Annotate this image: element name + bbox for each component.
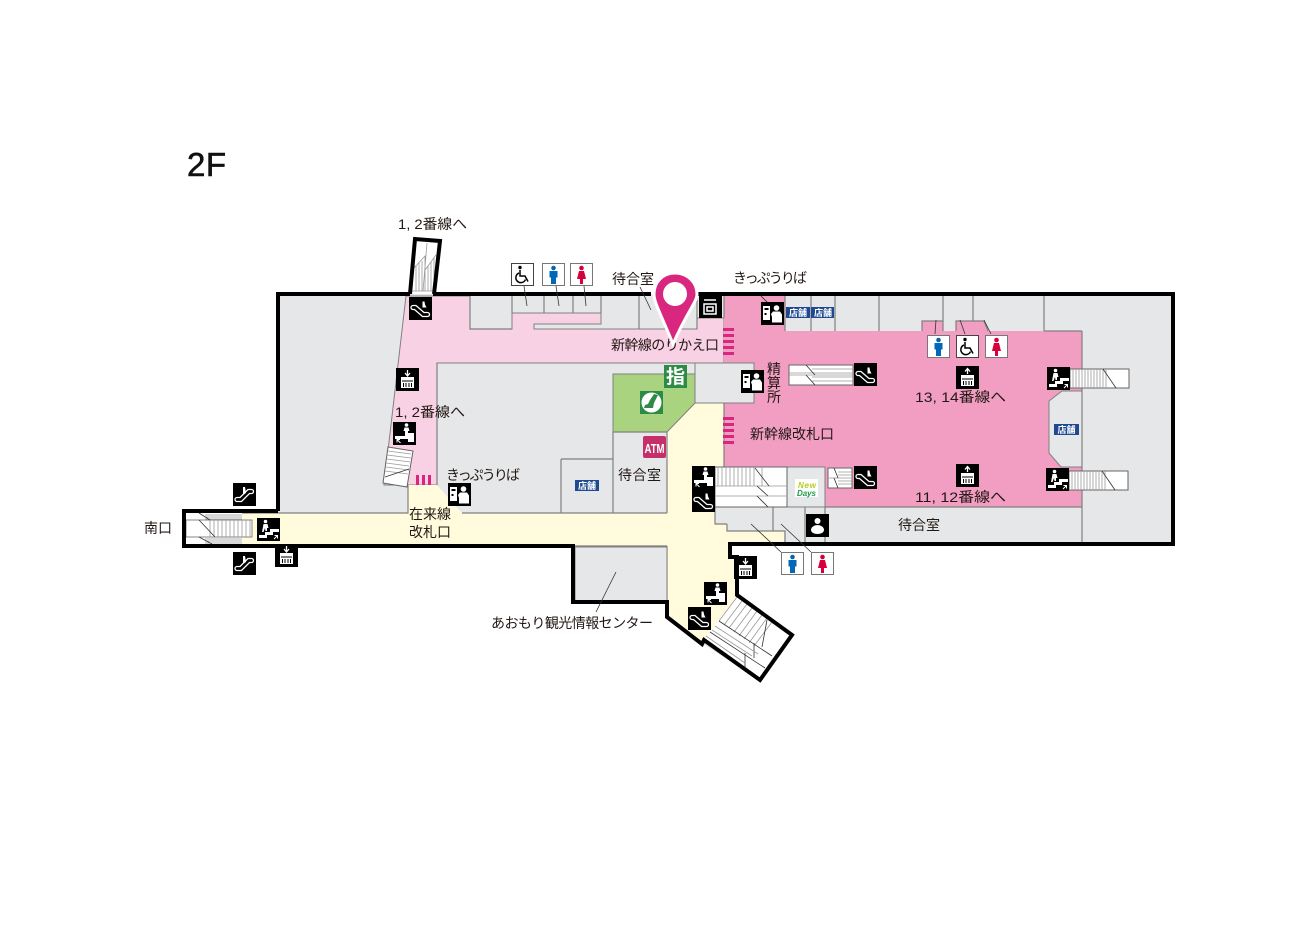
icon: NewDays logo: New [798, 481, 817, 490]
stairs: escalator north of platforms [789, 365, 853, 385]
label: ticket office: きっぷうりば [733, 270, 807, 286]
icon: escalator [854, 363, 877, 386]
icon: escalator [233, 483, 256, 506]
icon: men's toilet [542, 264, 564, 286]
shop label [786, 307, 810, 318]
icon: NewDays logo [795, 479, 818, 498]
icon: wheelchair toilet [956, 336, 978, 358]
gate: Shinkansen ticket gate [723, 417, 734, 444]
leader lines [524, 286, 991, 612]
label: conventional line ticket gate [409, 506, 451, 540]
label: waiting room east: 待合室 [898, 517, 940, 533]
stairs: southeast [704, 595, 792, 680]
gate markers [416, 328, 734, 485]
gate: Shinkansen transfer [723, 328, 734, 355]
icon: escalator [854, 466, 877, 489]
icon: wheelchair toilet [512, 264, 534, 286]
outer walls [184, 294, 1173, 680]
panel: tourist information centre [575, 547, 667, 601]
icon: escalator [692, 489, 715, 512]
icon: elevator up [956, 464, 979, 487]
shop label [575, 480, 599, 491]
icon: women's toilet [570, 264, 592, 286]
label: ticket office west: きっぷうりば [446, 467, 520, 483]
label: conventional line ticket gate: 在来線 [409, 506, 451, 522]
panel: partition lines [242, 296, 1082, 602]
panel: light pink concourse [384, 296, 724, 485]
icon: ATM [643, 436, 666, 458]
icon: elevator down [275, 544, 298, 567]
panel: grey building interior [184, 294, 1173, 680]
icon: reserved seat sign: 指 [666, 366, 685, 388]
icon: elevator down [734, 556, 757, 579]
icon: stairs [393, 422, 416, 445]
stairs: 11,12 platform [1069, 471, 1128, 490]
label: Shinkansen ticket gate: 新幹線改札口 [750, 426, 834, 442]
icon: women's toilet [986, 336, 1008, 358]
panel: east shop [1049, 391, 1082, 467]
shop label: 店舗 [789, 307, 807, 318]
icon: escalator [409, 297, 432, 320]
label: waiting room: 待合室 [612, 271, 654, 287]
shop label: 店舗 [1058, 424, 1076, 435]
label: to platforms 1,2 (north): 1, 2番線へ [398, 216, 467, 232]
shop label: 店舗 [578, 480, 596, 491]
icon: escalator [688, 607, 711, 630]
icon: lounge seat [640, 391, 663, 414]
stairs: 13,14 platform [1070, 369, 1129, 388]
north stair wall [410, 239, 440, 294]
panel: NewDays shop [787, 467, 825, 507]
panel: reserved seat lounge [613, 374, 695, 432]
icon: ticket office [448, 483, 471, 506]
icon: ticket adjustment [741, 370, 764, 393]
stairs: west side to 1,2 platform [383, 447, 413, 487]
icon: stairs [1046, 468, 1069, 491]
icon: men's toilet [782, 552, 804, 574]
title: floor label: 2F [187, 146, 226, 183]
icon: elevator up [956, 366, 979, 389]
icon: men's toilet [928, 336, 950, 358]
icon: stairs [257, 518, 280, 541]
icon: ticket office [761, 302, 784, 325]
icon: elevator down [396, 368, 419, 391]
stairs: north 1,2 platform [410, 239, 439, 294]
label: waiting room centre: 待合室 [618, 467, 661, 483]
icon: stairs [1047, 367, 1070, 390]
label: Shinkansen transfer gate: 新幹線のりかえ口 [611, 337, 719, 353]
label: to platforms 1,2 (west): 1, 2番線へ [395, 404, 465, 420]
icon: location pin [654, 273, 697, 344]
stairs: escalator south of platforms [828, 468, 852, 488]
label: to platforms 13,14: 13, 14番線へ [915, 389, 1006, 405]
icon: escalator [233, 552, 256, 575]
label: south exit: 南口 [144, 520, 172, 536]
stairs: central [715, 467, 787, 507]
label: conventional line ticket gate: 改札口 [409, 524, 451, 540]
gate: conventional lines [416, 475, 431, 485]
label: settlement office: 算 [767, 375, 781, 391]
floor plan base [184, 294, 1173, 680]
label: settlement office [767, 361, 781, 405]
shop label [1054, 424, 1079, 435]
shop label: 店舗 [814, 307, 832, 318]
panel: settlement office block [695, 363, 754, 403]
panel: cream concourse [242, 403, 784, 644]
icon: stairs [704, 582, 727, 605]
icon: NewDays logo: Days [797, 489, 817, 498]
icon: women's toilet [812, 552, 834, 574]
icon: ATM: ATM [644, 441, 664, 456]
label: settlement office: 所 [767, 389, 781, 405]
icon: coin lockers [699, 294, 722, 318]
icon: baby room [806, 514, 829, 537]
label: settlement office: 精 [767, 361, 781, 377]
icon: stairs [692, 466, 715, 489]
panel: pink Shinkansen concourse [724, 296, 1082, 507]
stairs: south exit [186, 513, 252, 544]
label: Aomori tourist information centre: あおもり観光情報センター [491, 615, 653, 631]
label: to platforms 11,12: 11, 12番線へ [915, 489, 1006, 505]
